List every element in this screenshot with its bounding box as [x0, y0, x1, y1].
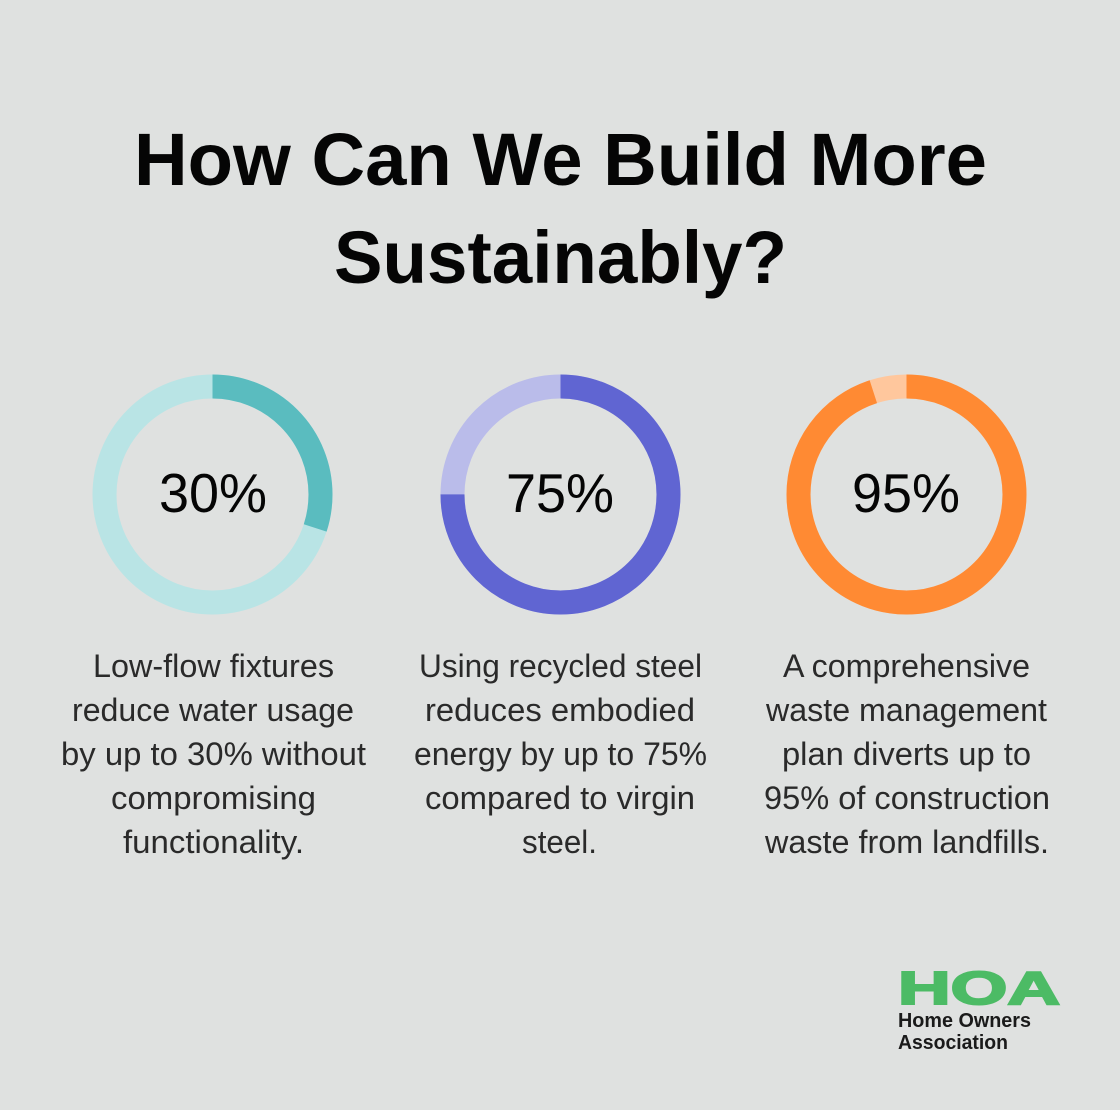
text: waste management description	[764, 648, 1050, 860]
logo: HOA Home Owners Association: Association	[898, 1032, 1008, 1054]
text: recycled steel description: Using recycled steel	[419, 648, 702, 684]
text: recycled steel description	[414, 648, 707, 860]
text: low-flow description: reduce water usage	[72, 692, 354, 728]
text: low-flow description	[61, 648, 366, 860]
panel: recycled steel	[414, 386, 707, 860]
donut chart: 95%: 95%	[852, 462, 960, 524]
text: recycled steel description: reduces embodied	[425, 692, 695, 728]
logo: HOA Home Owners Association	[898, 962, 1060, 1054]
text: recycled steel description: steel.	[522, 824, 597, 860]
logo: HOA Home Owners Association: Home Owners	[898, 1010, 1031, 1032]
panel: waste management	[764, 386, 1050, 860]
text: low-flow description: functionality.	[123, 824, 304, 860]
text: waste management description: waste from landfills.	[764, 824, 1049, 860]
logo: HOA Home Owners Association: HOA	[898, 962, 1060, 1014]
donut chart: 75%	[452, 386, 668, 602]
donut chart: 95%	[798, 386, 1014, 602]
text: waste management description: A comprehensive	[783, 648, 1030, 684]
title	[134, 118, 987, 299]
title: How Can We Build More	[134, 118, 987, 201]
panel: low-flow fixtures	[61, 386, 366, 860]
text: low-flow description: compromising	[111, 780, 316, 816]
donut chart: 75%: 75%	[506, 462, 614, 524]
text: waste management description: plan diverts up to	[782, 736, 1031, 772]
text: waste management description: 95% of construction	[764, 780, 1050, 816]
text: recycled steel description: energy by up to 75%	[414, 736, 707, 772]
donut chart: 30%	[104, 386, 320, 602]
text: waste management description: waste management	[765, 692, 1047, 728]
donut chart: 30%: 30%	[159, 462, 267, 524]
text: low-flow description: by up to 30% without	[61, 736, 366, 772]
title: Sustainably?	[334, 216, 787, 299]
text: low-flow description: Low-flow fixtures	[93, 648, 334, 684]
text: recycled steel description: compared to virgin	[425, 780, 695, 816]
